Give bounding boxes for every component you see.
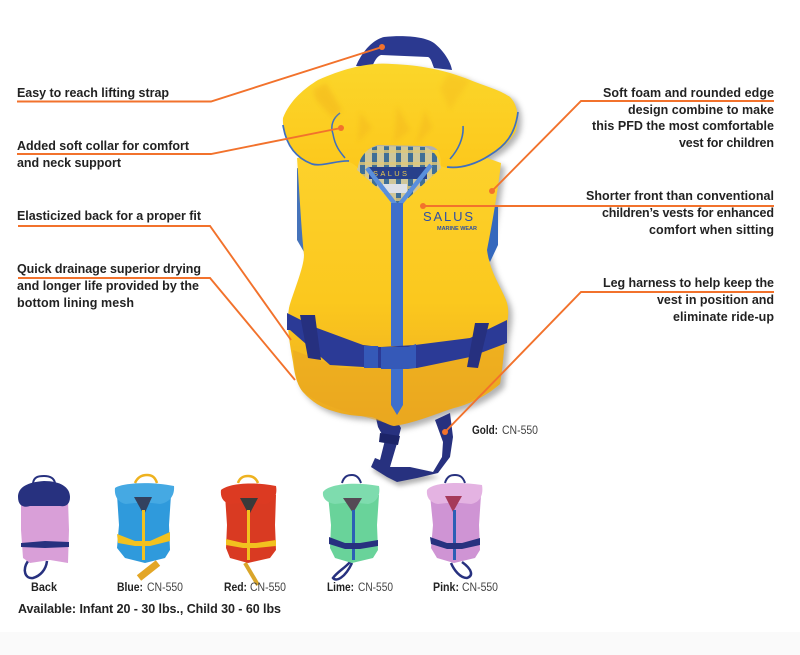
pink handle — [445, 475, 465, 483]
lime body — [328, 495, 379, 563]
side panels — [297, 168, 309, 252]
pink zipper — [453, 510, 456, 560]
collar blue piping — [283, 112, 518, 167]
leader: shorter front — [420, 203, 774, 209]
label: lime: CN-550 — [358, 580, 393, 594]
blue body — [117, 495, 171, 563]
pink leg loop — [451, 562, 471, 578]
callout: quick drainage: Quick drainage superior drying — [17, 262, 201, 276]
leader: leg harness — [442, 292, 774, 435]
neck label text: SALUS — [373, 169, 407, 178]
callout: shorter front: children’s vests for enhanced — [602, 206, 774, 220]
waist belt — [287, 313, 507, 368]
callout: quick drainage — [17, 262, 201, 310]
strap slider — [379, 433, 400, 445]
thumbnail: red vest — [221, 476, 276, 585]
lime neck — [343, 498, 362, 513]
label: red — [224, 580, 286, 594]
callout: soft foam: this PFD the most comfortable — [592, 119, 774, 133]
lime handle — [342, 475, 361, 483]
back leg loop — [25, 561, 47, 578]
red handle — [238, 476, 258, 483]
leader: drainage mesh — [18, 278, 295, 380]
label: back: Back — [31, 580, 57, 594]
callout: soft collar: and neck support — [17, 156, 122, 170]
vest body shadow — [292, 154, 512, 430]
red tow strap — [245, 563, 258, 585]
collar shadow — [287, 67, 522, 168]
logo on chest: SALUS — [423, 209, 473, 224]
belt keepers — [300, 315, 489, 368]
blue zipper — [142, 510, 145, 560]
callout: soft collar — [17, 139, 190, 170]
blue collar — [115, 483, 174, 504]
callout: leg harness: vest in position and — [657, 293, 774, 307]
pink body — [430, 495, 481, 563]
red body — [225, 495, 276, 563]
blue neck — [134, 497, 152, 515]
label: gold: CN-550 — [502, 423, 538, 437]
callout leaders — [17, 44, 774, 435]
callout: soft foam: design combine to make — [628, 103, 774, 117]
callout: soft foam: vest for children — [679, 136, 774, 150]
callout: soft collar: Added soft collar for comfort — [17, 139, 190, 153]
leader: elasticized back — [18, 226, 291, 340]
callout: shorter front — [586, 189, 774, 237]
label: lime: Lime: — [327, 580, 354, 594]
lime belt — [329, 537, 378, 549]
back belt — [21, 541, 69, 548]
leg harness strap — [371, 413, 453, 482]
pink collar — [427, 483, 482, 504]
lifting strap handle — [356, 36, 452, 70]
back panel — [21, 500, 69, 563]
left neck pad edge — [332, 113, 345, 158]
label: pink: Pink: — [433, 580, 459, 594]
thumbnail: back view — [18, 476, 70, 578]
callout: shorter front: comfort when sitting — [649, 223, 774, 237]
label: blue: Blue: — [117, 580, 143, 594]
red belt — [226, 539, 276, 548]
label: lime — [327, 580, 393, 594]
availability note: Available: Infant 20 - 30 lbs., Child 30 - 60 lbs — [18, 602, 281, 616]
callout: quick drainage: bottom lining mesh — [17, 296, 134, 310]
callout: leg harness — [603, 276, 774, 324]
callout: leg harness: Leg harness to help keep the — [603, 276, 774, 290]
lime leg loop — [333, 562, 352, 579]
blue belt — [117, 532, 170, 546]
vest body — [288, 150, 508, 426]
right neck pad edge — [450, 126, 463, 159]
back handle — [33, 476, 55, 483]
leg harness shadow — [373, 462, 440, 486]
neck label — [369, 167, 427, 179]
label: red: CN-550 — [250, 580, 286, 594]
leader: soft foam — [489, 101, 774, 194]
callout: lifting strap: Easy to reach lifting strap — [17, 86, 169, 100]
label: blue — [117, 580, 183, 594]
leader: lifting strap — [17, 44, 385, 102]
orange fabric shading — [293, 336, 505, 426]
red neck — [240, 498, 258, 515]
collar left fold — [313, 83, 342, 118]
thumbnail: pink vest — [427, 475, 482, 578]
label: pink: CN-550 — [462, 580, 498, 594]
lime collar — [323, 484, 379, 504]
blue tow strap — [139, 563, 158, 578]
leader: collar — [17, 125, 344, 154]
label: blue: CN-550 — [147, 580, 183, 594]
label: pink — [433, 580, 498, 594]
pink neck — [445, 496, 462, 512]
front zipper — [391, 203, 403, 415]
blue handle — [135, 475, 157, 483]
callout: shorter front: Shorter front than conventional — [586, 189, 774, 203]
bottom band — [0, 632, 800, 655]
back collar — [18, 481, 70, 507]
collar centre pleats — [358, 105, 432, 145]
neck white tag — [383, 184, 407, 193]
lime zipper — [352, 510, 355, 560]
pink belt — [430, 537, 480, 549]
callout: elasticized back: Elasticized back for a proper fit — [17, 209, 202, 223]
thumbnail: lime vest — [323, 475, 379, 579]
main gold vest — [283, 36, 522, 486]
callout: quick drainage: and longer life provided by the — [17, 279, 199, 293]
label: gold — [472, 423, 538, 437]
label: gold: Gold: — [472, 423, 498, 437]
thumbnail: blue vest — [115, 475, 174, 578]
collar — [283, 64, 518, 169]
red collar — [221, 483, 276, 504]
neck plaid lining — [357, 146, 441, 204]
collar right fold — [440, 74, 470, 110]
red zipper — [247, 510, 250, 560]
belt buckle — [364, 344, 416, 369]
callout: soft foam — [592, 86, 774, 150]
zipper V edges — [367, 165, 431, 204]
callout: soft foam: Soft foam and rounded edge — [603, 86, 774, 100]
logo subtitle: MARINE WEAR — [437, 226, 477, 232]
callout: leg harness: eliminate ride-up — [673, 310, 774, 324]
label: red: Red: — [224, 580, 247, 594]
